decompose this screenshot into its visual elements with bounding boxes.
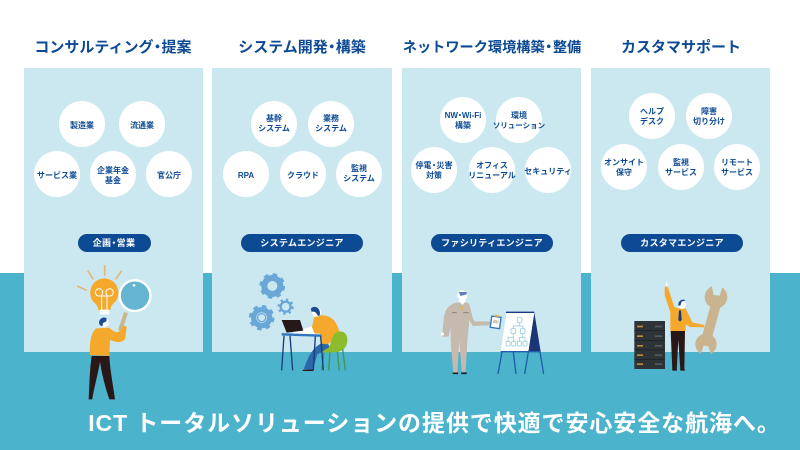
bubble: onsite maintenance: オンサイト [604,158,644,167]
bubble: manufacturing: 製造業 [70,120,94,130]
bubble: core systems [251,101,297,147]
bubble: business systems: システム [315,124,347,133]
illustration: facility engineer with org chart board [441,290,544,374]
torso [311,315,339,344]
panel background [24,68,203,352]
role pill: system engineer: システムエンジニア [260,238,344,248]
bubble: disaster measures: 停電・災害 [416,160,452,170]
icon: wrench [695,286,727,355]
bubble: fault isolation [686,93,732,139]
bubble: environment solutions [493,97,546,143]
bubble: NW Wi-Fi: NW・Wi-Fi [445,111,481,120]
illustration: person with light bulb and magnifier [77,265,150,399]
bubble: monitoring service [658,144,704,190]
bubble: environment solutions: ソリューション [493,121,546,130]
bubble: RPA [223,151,269,197]
org chart [506,317,527,346]
bubble: remote service: サービス [721,167,753,177]
bubble: government [146,151,192,197]
bubble: business systems [308,101,354,147]
bubble: RPA: RPA [238,171,254,180]
tagline: ICT トータルソリューションの提供で快適で安心安全な航海へ。 [88,410,781,436]
heading: system development: システム開発・構築 [238,38,366,56]
bubble: monitoring systems: 監視 [351,163,367,173]
role pill: sales: 企画・営業 [93,237,135,248]
heading: network: ネットワーク環境構築・整備 [403,39,581,56]
bubble: monitoring service: 監視 [673,157,689,167]
bubble: onsite maintenance [601,144,647,190]
panel background [591,68,770,352]
chair [321,331,347,352]
bubble: onsite maintenance: 保守 [616,167,632,177]
illustration: engineer at laptop with gears [251,275,347,370]
panel background [402,68,581,352]
bubble: remote service: リモート [721,158,753,167]
role pill: facility engineer [431,234,553,252]
easel [528,312,541,352]
bubble: help desk: デスク [640,116,664,126]
bubble: office renewal: リニューアル [468,171,516,180]
bubble: security: セキュリティ [524,167,572,176]
bubble: help desk [629,93,675,139]
bubble: core systems: 基幹 [266,113,282,123]
heading: customer support: カスタマサポート [621,39,741,56]
bubble: office renewal: オフィス [476,161,508,170]
panel: consulting and proposal [24,38,203,352]
bubble: core systems: システム [258,124,290,133]
bubble: distribution: 流通業 [130,120,154,130]
pants [304,342,330,370]
panel: customer support [591,39,770,352]
bubble: office renewal [468,147,516,193]
role pill: customer engineer [621,234,743,252]
bubble: pension: 基金 [105,175,121,185]
bubble: environment solutions: 環境 [511,110,527,120]
bubble: remote service [714,144,760,190]
panel background [212,68,392,352]
bubble: cloud [280,151,326,197]
bubble: pension [90,151,136,197]
icon: server rack [634,321,665,369]
clipboard [489,314,502,329]
bubble: NW Wi-Fi: 構築 [455,120,471,130]
panel: system development [212,38,392,352]
bubble: monitoring systems: システム [343,174,375,183]
icon: gears [251,275,293,329]
bubble: business systems: 業務 [323,113,339,123]
heading: consulting: コンサルティング・提案 [34,38,192,56]
illustration: customer engineer with server rack and wrench [634,281,727,370]
bubble: help desk: ヘルプ [640,107,664,116]
bubble: manufacturing [59,101,105,147]
bubble: cloud: クラウド [287,170,319,180]
role pill: facility engineer: ファシリティエンジニア [441,238,543,248]
bubble: NW Wi-Fi [440,97,486,143]
ground band over the panels [0,352,800,450]
bubble: service [34,151,80,197]
panel: network environment [402,39,581,352]
role pill: customer engineer: カスタマエンジニア [640,237,724,248]
role pill: sales [78,234,151,252]
bubble: fault isolation: 障害 [701,106,717,116]
bubble: monitoring systems [336,151,382,197]
bubble: security [524,147,572,193]
sea background [0,273,800,450]
bubble: government: 官公庁 [157,170,181,180]
role pill: system engineer [241,234,363,252]
bubble: monitoring service: サービス [665,167,697,177]
bubble: service: サービス業 [37,170,77,180]
bubble: fault isolation: 切り分け [693,116,725,126]
bubble: disaster measures: 対策 [426,170,442,180]
bubble: pension: 企業年金 [97,165,129,175]
bubble: disaster measures [411,147,457,193]
bubble: distribution [119,101,165,147]
